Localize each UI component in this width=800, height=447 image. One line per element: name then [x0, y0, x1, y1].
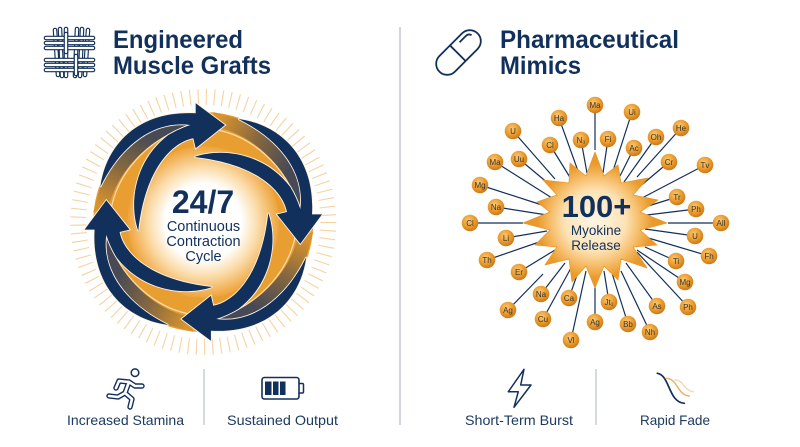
center stat: Contraction: [166, 234, 241, 250]
myokine nodes: Ac: [629, 144, 639, 153]
starburst: [523, 152, 667, 288]
shaded blades: [93, 112, 313, 332]
myokine nodes: Tr: [673, 193, 681, 202]
center stat: Myokine: [571, 223, 621, 238]
myokine nodes: Ca: [564, 294, 575, 303]
icon: capsule: [432, 26, 485, 79]
title: Pharmaceutical Mimics: Pharmaceutical: [500, 26, 679, 54]
myokine nodes: Vl: [567, 336, 575, 345]
chart: myokine starburst: [462, 97, 729, 348]
myokine nodes: N₃: [576, 136, 586, 145]
title: Pharmaceutical Mimics: Mimics: [500, 52, 581, 80]
orange disc: [93, 112, 313, 332]
bottom dividers: [204, 369, 596, 425]
icon: battery: [262, 378, 304, 399]
myokine nodes: Ag: [590, 318, 600, 327]
myokine nodes: Mg: [474, 181, 486, 190]
myokine nodes: Ha: [554, 114, 565, 123]
myokine nodes: [462, 97, 729, 348]
label: Sustained Output: Sustained Output: [227, 412, 338, 428]
myokine nodes: Jt₁: [605, 298, 614, 307]
icon: fading curves: [657, 373, 693, 403]
title: Pharmaceutical Mimics: [500, 26, 679, 80]
myokine nodes: Tv: [701, 161, 709, 170]
myokine nodes: Cu: [538, 315, 548, 324]
myokine nodes: As: [652, 302, 662, 311]
myokine nodes: Bb: [623, 320, 633, 329]
center stat: 24/7: [172, 184, 234, 220]
myokine nodes: Fi: [605, 135, 612, 144]
myokine nodes: Ui: [628, 108, 636, 117]
myokine nodes: Li: [503, 234, 509, 243]
myokine nodes: Nh: [645, 328, 655, 337]
myokine nodes: Th: [482, 256, 492, 265]
myokine nodes: U: [510, 127, 516, 136]
glowing core: [127, 146, 279, 298]
icon: lightning bolt: [508, 369, 531, 407]
myokine nodes: He: [676, 124, 687, 133]
center stat: Release: [571, 238, 621, 253]
myokine nodes: Ag: [503, 306, 513, 315]
myokine nodes: Mg: [679, 278, 691, 287]
center divider: [399, 27, 401, 425]
myokine nodes: All: [717, 219, 726, 228]
myokine nodes: Ti: [673, 257, 679, 266]
myokine nodes: Ph: [683, 303, 693, 312]
myokine nodes: Cl: [466, 219, 474, 228]
myokine nodes: Uu: [514, 155, 524, 164]
myokine nodes: Ma: [489, 158, 501, 167]
four rotating arrows: [85, 103, 322, 341]
label: Rapid Fade: Rapid Fade: [640, 412, 710, 428]
chart: continuous contraction cycle: [78, 97, 328, 347]
myokine nodes: Ph: [691, 205, 701, 214]
center stat: 100+: [562, 189, 631, 224]
myokine nodes: Oh: [651, 133, 661, 142]
connector lines: [470, 105, 721, 340]
myokine nodes: Na: [536, 290, 547, 299]
myokine nodes: Er: [515, 268, 523, 277]
label: Short-Term Burst: Short-Term Burst: [465, 412, 573, 428]
myokine nodes: U: [692, 232, 698, 241]
myokine nodes: Fh: [704, 252, 714, 261]
center stat: Continuous: [167, 219, 240, 235]
title: Engineered Muscle Grafts: Engineered: [113, 26, 243, 54]
label: Increased Stamina: Increased Stamina: [67, 412, 184, 428]
icon: woven muscle fibers: [46, 29, 93, 76]
myokine nodes: Cr: [665, 158, 674, 167]
title: Engineered Muscle Grafts: [113, 26, 271, 80]
center stat: [166, 184, 241, 265]
icon: runner: [109, 369, 142, 407]
center stat: Cycle: [185, 249, 222, 265]
myokine nodes: Ma: [589, 101, 601, 110]
sun rays: [78, 97, 328, 347]
center stat: [562, 189, 631, 253]
title: Engineered Muscle Grafts: Muscle Grafts: [113, 52, 271, 80]
myokine nodes: Cl: [546, 141, 554, 150]
myokine nodes: Na: [491, 203, 502, 212]
